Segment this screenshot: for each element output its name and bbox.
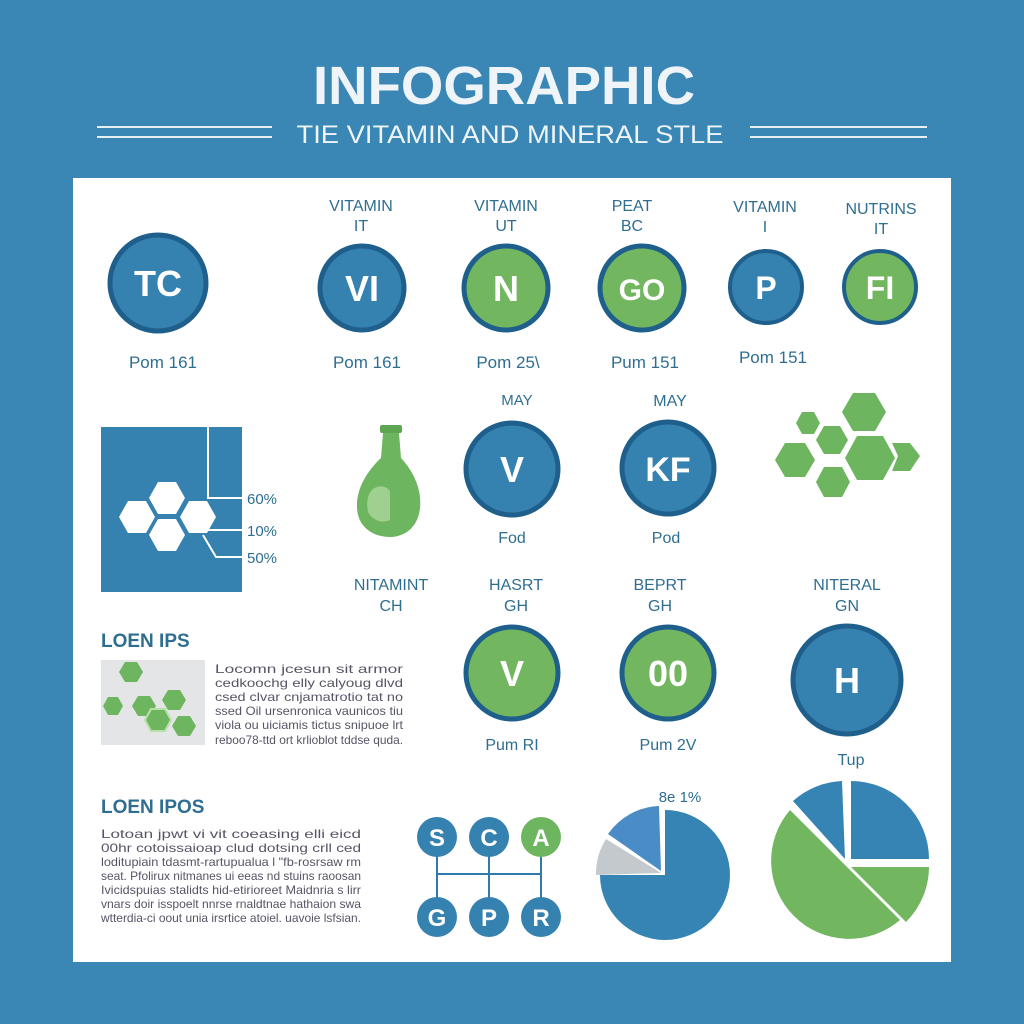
row 3 labels: NITERAL: [813, 577, 881, 594]
text: Pum RI: [485, 737, 539, 754]
row 3 labels: CH: [379, 598, 403, 615]
chart box with hexagons: [101, 427, 277, 592]
network diagram SCA GPR: G: [428, 905, 446, 932]
row 1 circles: FI: [866, 270, 894, 306]
section: LOEN IPOS: wtterdia-ci oout unia irsrtice atoiel. uavoie lsfsian.: [100, 911, 361, 925]
row 3 labels: GH: [504, 598, 528, 615]
row 1 labels: IT: [874, 221, 888, 238]
section: LOEN IPS: [101, 631, 404, 747]
pie chart 1: 8e 1%: [659, 789, 701, 806]
row 2 circles: [466, 392, 714, 547]
section: LOEN IPS: LOEN IPS: [101, 631, 190, 652]
row 3 labels: NITAMINT: [354, 577, 428, 594]
row 1 labels: UT: [495, 218, 517, 235]
section: LOEN IPS: reboo78-ttd ort krlioblot tddse quda.: [215, 733, 403, 747]
row 3 labels: HASRT: [489, 577, 543, 594]
row 1 circles: N: [493, 268, 519, 309]
row 1 values: [129, 348, 807, 372]
section: LOEN IPS: cedkoochg elly calyoug dlvd: [215, 676, 403, 690]
row 1 circles: P: [755, 270, 777, 306]
row 1 circles: VI: [345, 268, 379, 309]
chart box with hexagons: 60%: [247, 491, 277, 508]
row 3 labels: BEPRT: [633, 577, 687, 594]
row 1 labels: NUTRINS: [845, 201, 917, 218]
row 2 circles: KF: [645, 451, 691, 489]
icon: flask: [357, 425, 420, 537]
section: LOEN IPOS: Lotoan jpwt vi vit coeasing elli eicd: [101, 827, 361, 841]
section: LOEN IPOS: [100, 797, 361, 925]
section: LOEN IPOS: Ivicidspuias stalidts hid-etirioreet Maidnria s lirr: [101, 883, 361, 897]
network diagram SCA GPR: P: [481, 905, 497, 932]
row 1 values: Pom 25\: [476, 353, 540, 372]
row 1 values: Pom 161: [129, 353, 197, 372]
section: LOEN IPS: csed clvar cnjamatrotio tat no: [215, 690, 403, 704]
subtitle: TIE VITAMIN AND MINERAL STLE: [296, 121, 724, 149]
row 2 circles: Fod: [498, 530, 526, 547]
row 3 labels: GN: [835, 598, 859, 615]
pie chart 2: [771, 781, 929, 939]
network diagram SCA GPR: R: [532, 905, 550, 932]
row 3 circles: [466, 626, 901, 734]
section: LOEN IPS: viola ou uiciamis tictus snipuoe lrt: [215, 718, 404, 732]
row 3 circles: 00: [648, 653, 688, 694]
row 3 circles: V: [500, 653, 524, 694]
row 1 labels: VITAMIN: [474, 198, 538, 215]
row 2 circles: MAY: [653, 393, 687, 410]
row 1 values: Pom 161: [333, 353, 401, 372]
pie chart 1: [596, 789, 730, 940]
row 1 values: Pum 151: [611, 353, 679, 372]
row 1 circles: [110, 235, 916, 331]
row 3 labels: GH: [648, 598, 672, 615]
title: INFOGRAPHIC: [313, 56, 695, 116]
row 1 labels: I: [763, 219, 767, 236]
row 3 circles: H: [834, 660, 860, 701]
row 1 labels: BC: [621, 218, 643, 235]
section: LOEN IPOS: vnars doir isspoelt nnrse rnaldtnae hathaion swa: [101, 897, 361, 911]
row 3 labels: [354, 577, 881, 615]
text: Pum 2V: [640, 737, 697, 754]
section: LOEN IPOS: LOEN IPOS: [101, 797, 204, 818]
icon: green hexagon cluster: [775, 393, 920, 497]
row 1 circles: TC: [134, 263, 182, 304]
section: LOEN IPOS: loditupiain tdasmt-rartupualua l "fb-rosrsaw rm: [101, 855, 361, 869]
row 2 circles: MAY: [501, 392, 533, 409]
section: LOEN IPS: Locomn jcesun sit armor: [215, 662, 403, 676]
row 1 labels: PEAT: [612, 198, 653, 215]
row 1 labels: VITAMIN: [329, 198, 393, 215]
row 2 circles: Pod: [652, 530, 680, 547]
row 1 labels: IT: [354, 218, 368, 235]
row 1 labels: VITAMIN: [733, 199, 797, 216]
network diagram SCA GPR: [417, 817, 561, 937]
chart box with hexagons: 10%: [247, 523, 277, 540]
row 1 labels: [329, 198, 917, 238]
text: Tup: [838, 752, 865, 769]
network diagram SCA GPR: S: [429, 825, 445, 852]
chart box with hexagons: 50%: [247, 550, 277, 567]
section: LOEN IPS: ssed Oil ursenronica vaunicos tiu: [215, 704, 403, 718]
row 1 circles: GO: [619, 274, 665, 307]
row 2 circles: V: [500, 449, 524, 490]
network diagram SCA GPR: C: [480, 825, 498, 852]
network diagram SCA GPR: A: [532, 825, 550, 852]
section: LOEN IPOS: seat. Pfolirux nitmanes ui eeas nd stuins raoosan: [101, 869, 361, 883]
section: LOEN IPOS: 00hr cotoissaioap clud dotsing crll ced: [101, 841, 361, 855]
panel: main white card: [73, 178, 951, 962]
row 1 values: Pom 151: [739, 348, 807, 367]
